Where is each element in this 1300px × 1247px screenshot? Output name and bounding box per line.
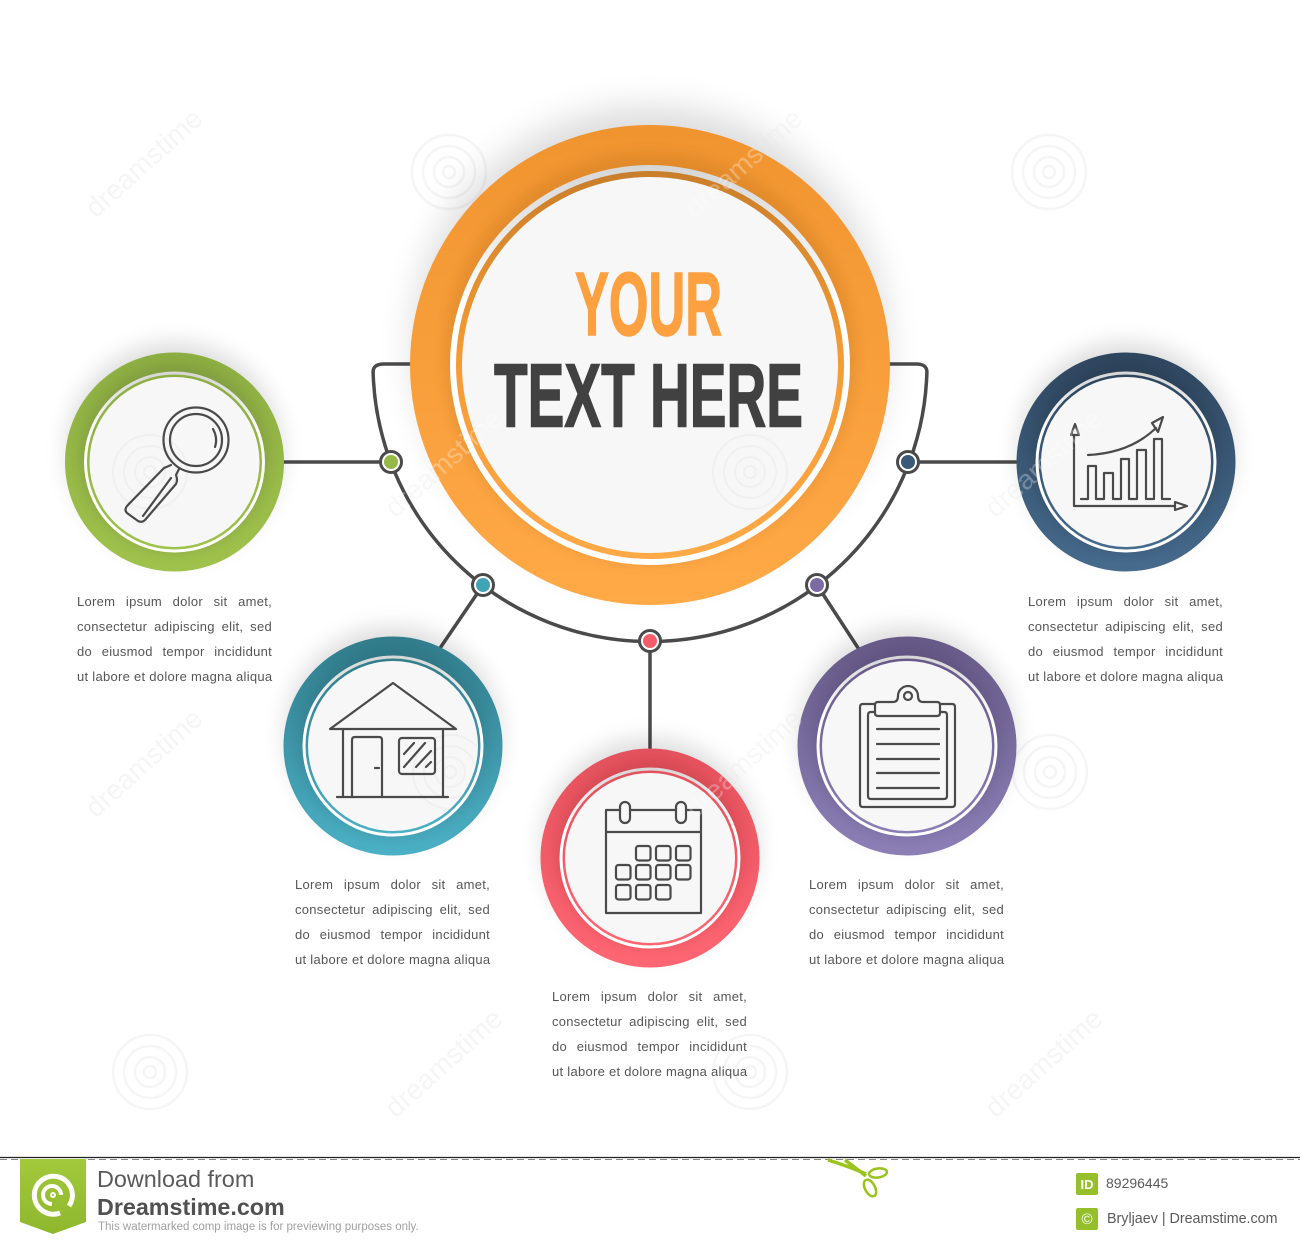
text block: purple: Lorem ipsum dolor sit amet, — [809, 877, 1004, 892]
watermark overlay on rings: dreamstime — [379, 402, 508, 523]
text block: purple: do eiusmod tempor incididunt — [809, 927, 1004, 942]
watermark pattern: dreamstime — [679, 102, 808, 223]
copyright badge: © — [1081, 1211, 1093, 1228]
watermark on green disk — [113, 435, 187, 509]
circle: teal — [284, 627, 502, 856]
footer: disclaimer: This watermarked comp image is for previewing purposes only. — [98, 1221, 419, 1233]
watermark pattern: dreamstime — [979, 1002, 1108, 1123]
watermark pattern: dreamstime — [379, 1002, 508, 1123]
connector lines — [280, 462, 1020, 755]
text block: teal: ut labore et dolore magna aliqua — [295, 952, 490, 967]
heading: text here: TEXT HERE — [494, 346, 803, 446]
watermark overlay on rings: dreamstime — [679, 702, 808, 823]
text block: red: do eiusmod tempor incididunt — [552, 1039, 747, 1054]
text block: navy: do eiusmod tempor incididunt — [1028, 644, 1223, 659]
text block: green — [77, 594, 272, 684]
scissors icon — [828, 1160, 888, 1198]
text block: purple: ut labore et dolore magna aliqua — [809, 952, 1004, 967]
text block: red: Lorem ipsum dolor sit amet, — [552, 989, 747, 1004]
node: teal — [472, 574, 494, 596]
text block: green: ut labore et dolore magna aliqua — [77, 669, 272, 684]
watermark pattern — [79, 102, 1108, 1123]
watermark pattern: dreamstime — [79, 702, 208, 823]
text block: teal: consectetur adipiscing elit, sed — [295, 902, 490, 917]
text block: green: do eiusmod tempor incididunt — [77, 644, 272, 659]
watermark pattern: dreamstime — [979, 402, 1108, 523]
copyright badge — [1076, 1208, 1098, 1230]
footer cut line — [0, 1158, 1300, 1160]
watermark overlay on rings: dreamstime — [679, 102, 808, 223]
text block: purple: consectetur adipiscing elit, sed — [809, 902, 1004, 917]
text block: teal: Lorem ipsum dolor sit amet, — [295, 877, 490, 892]
connector arc — [373, 364, 927, 642]
watermark pattern: dreamstime — [379, 402, 508, 523]
text block: red — [552, 989, 748, 1079]
icon: house — [330, 683, 456, 797]
text block: teal — [295, 877, 490, 967]
text block: green: Lorem ipsum dolor sit amet, — [77, 594, 272, 609]
icon: clipboard — [860, 686, 955, 807]
id badge: ID — [1080, 1177, 1094, 1192]
circle: green — [65, 343, 284, 572]
watermark on main disk — [713, 435, 787, 509]
text block: red: ut labore et dolore magna aliqua — [552, 1064, 747, 1079]
node: red — [640, 630, 660, 652]
icon: growth chart — [1071, 417, 1187, 510]
circle: red — [540, 739, 760, 968]
text block: purple — [809, 877, 1004, 967]
watermark pattern: dreamstime — [679, 702, 808, 823]
text block: navy: consectetur adipiscing elit, sed — [1028, 619, 1223, 634]
text block: navy: ut labore et dolore magna aliqua — [1028, 669, 1223, 684]
footer: dreamstime: Dreamstime.com — [97, 1194, 285, 1220]
main circle — [410, 107, 890, 605]
node: navy — [898, 452, 918, 472]
watermark pattern: dreamstime — [79, 102, 208, 223]
text block: green: consectetur adipiscing elit, sed — [77, 619, 272, 634]
id badge — [1076, 1173, 1098, 1195]
icon: magnifier — [126, 408, 228, 522]
watermark overlay on rings — [379, 102, 1108, 823]
icon: calendar — [606, 802, 701, 913]
watermark on teal disk — [449, 746, 478, 810]
footer: image id: 89296445 — [1106, 1175, 1168, 1191]
text block: teal: do eiusmod tempor incididunt — [295, 927, 490, 942]
text block: navy: Lorem ipsum dolor sit amet, — [1028, 594, 1223, 609]
footer: download from: Download from — [97, 1166, 254, 1192]
text block: navy — [1028, 594, 1224, 684]
heading: your: YOUR — [575, 255, 722, 355]
circle: navy — [1016, 343, 1236, 572]
footer: author: Bryljaev | Dreamstime.com — [1107, 1211, 1278, 1227]
text block: red: consectetur adipiscing elit, sed — [552, 1014, 747, 1029]
node: purple — [806, 574, 828, 596]
watermark overlay on rings: dreamstime — [979, 402, 1108, 523]
node: green — [380, 452, 402, 472]
circle: purple — [798, 627, 1016, 856]
footer logo badge — [20, 1159, 86, 1234]
